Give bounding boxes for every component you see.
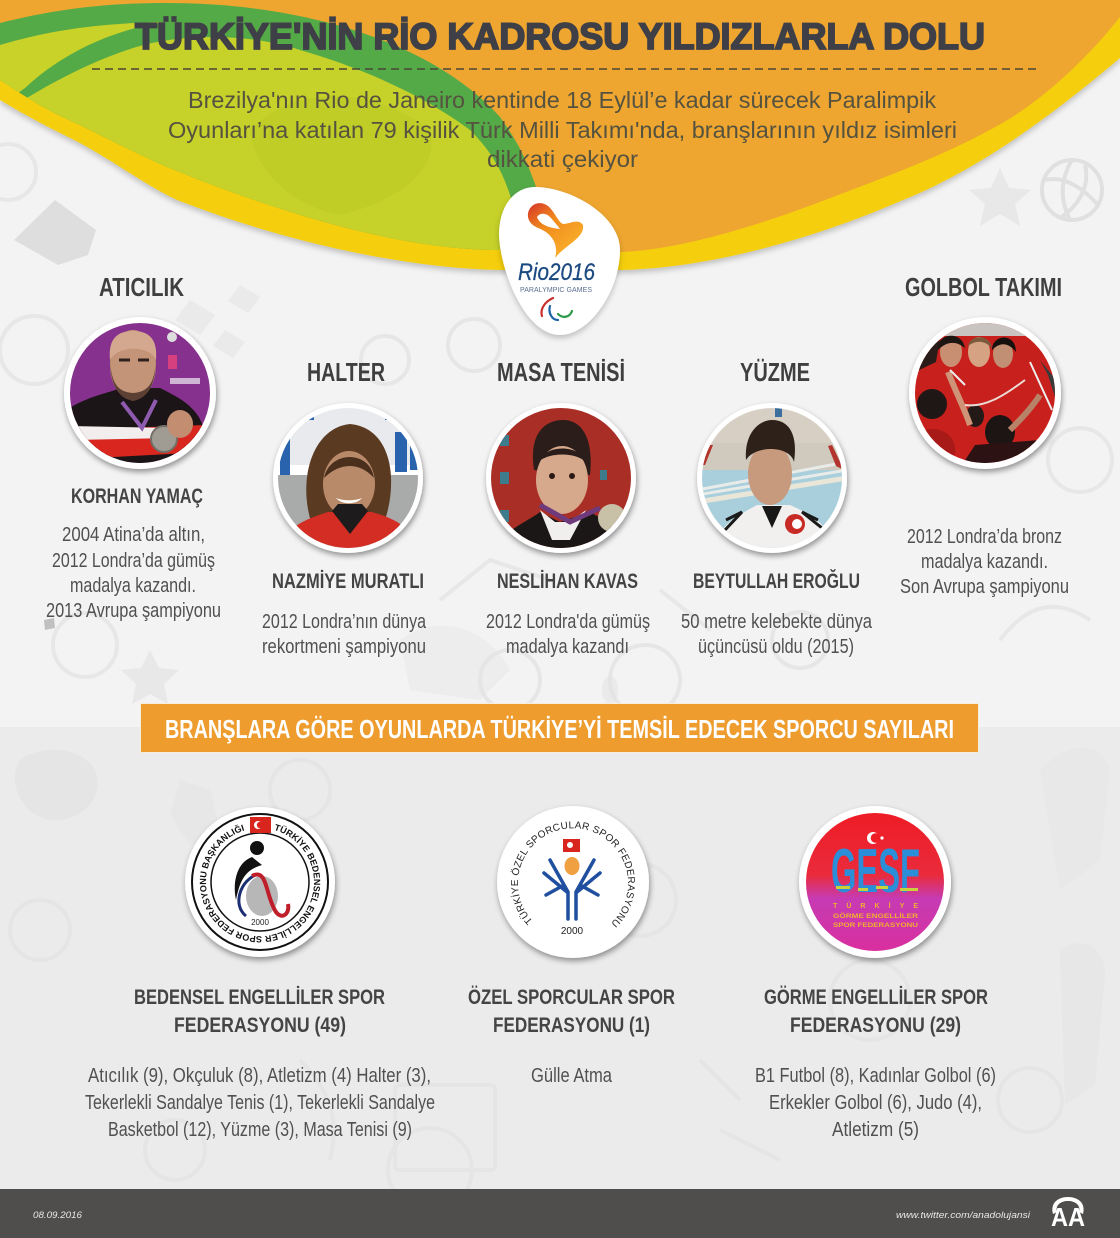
description: 2012 Londra’nın dünya <box>262 611 427 633</box>
logo: Türkiye Özel Sporcular Spor Federasyonu: TÜRKİYE ÖZEL SPORCULAR SPOR FEDERASYONU <box>510 822 635 928</box>
branch list: Atletizm (5) <box>832 1119 919 1141</box>
icon: Anadolu Agency logo: AA <box>1051 1202 1085 1232</box>
heading: swimming: YÜZME <box>740 357 810 387</box>
federation name: BEDENSEL ENGELLİLER SPOR <box>134 986 385 1009</box>
description: 2012 Londra'da gümüş <box>486 611 650 633</box>
background: upper light section <box>0 0 1120 727</box>
name: NAZMİYE MURATLI <box>272 570 424 593</box>
subtitle: Oyunları’na katılan 79 kişilik Türk Milli Takımı'nda, branşlarının yıldız isimleri <box>168 117 957 143</box>
federation name: FEDERASYONU (29) <box>790 1014 961 1037</box>
top ribbon: yellow band <box>0 0 1120 270</box>
federation: Görme Engelliler <box>755 806 996 1141</box>
footer bar <box>0 1189 1120 1238</box>
description: madalya kazandı <box>506 636 629 658</box>
federation name <box>134 986 385 1037</box>
federation: Özel Sporcular <box>468 806 675 1087</box>
logo: GESF: SPOR FEDERASYONU <box>833 923 918 929</box>
title: TÜRKİYE'NİN RİO KADROSU YILDIZLARLA DOLU <box>135 16 985 57</box>
branch list: Basketbol (12), Yüzme (3), Masa Tenisi (9) <box>108 1119 412 1141</box>
description: rekortmeni şampiyonu <box>262 636 426 658</box>
background silhouettes and stars <box>14 168 1110 1105</box>
federation name <box>764 986 988 1037</box>
icon: agitos <box>541 298 572 320</box>
heading: goalball team: GOLBOL TAKIMI <box>905 272 1062 302</box>
description: Son Avrupa şampiyonu <box>900 576 1069 598</box>
logo: Türkiye Bedensel Engelliler Spor Federasyonu <box>182 806 340 964</box>
photo: Neslihan Kavas <box>486 403 636 560</box>
name: KORHAN YAMAÇ <box>71 485 203 508</box>
logo: GESF <box>799 806 951 958</box>
heading: table tennis: MASA TENİSİ <box>497 357 625 387</box>
description: 50 metre kelebekte dünya <box>681 611 873 633</box>
branch list <box>755 1065 996 1141</box>
branch list <box>85 1065 435 1141</box>
description: üçüncüsü oldu (2015) <box>698 636 854 658</box>
athlete: Nazmiye Muratlı <box>262 357 427 658</box>
top ribbon: orange, green and lime waves <box>0 0 1120 270</box>
logo: Türkiye Özel Sporcular Spor Federasyonu: 2000 <box>561 926 584 937</box>
photo: Golbol team <box>909 317 1061 469</box>
description: 2012 Londra’da gümüş <box>52 550 215 572</box>
description: madalya kazandı. <box>70 575 196 597</box>
logo: Türkiye Bedensel Engelliler Spor Federasyonu: TÜRKİYE BEDENSEL ENGELLİLER SPOR FEDERASYONU BAŞKANLIĞI <box>200 824 320 942</box>
branch list: B1 Futbol (8), Kadınlar Golbol (6) <box>755 1065 996 1087</box>
section banner <box>140 703 979 753</box>
branch list: Atıcılık (9), Okçuluk (8), Atletizm (4) Halter (3), <box>88 1065 431 1087</box>
federation name: GÖRME ENGELLİLER SPOR <box>764 986 988 1009</box>
description <box>900 526 1069 598</box>
subtitle: Brezilya'nın Rio de Janeiro kentinde 18 Eylül’e kadar sürecek Paralimpik <box>188 87 937 113</box>
branch list: Erkekler Golbol (6), Judo (4), <box>769 1092 982 1114</box>
logo: Türkiye Bedensel Engelliler Spor Federasyonu: 2000 <box>251 918 269 927</box>
dashed divider <box>92 68 1040 70</box>
branch list: Tekerlekli Sandalye Tenis (1), Tekerlekli Sandalye <box>85 1092 435 1114</box>
description <box>262 611 427 658</box>
description: 2013 Avrupa şampiyonu <box>46 600 221 622</box>
federation name: ÖZEL SPORCULAR SPOR <box>468 986 675 1009</box>
federation name <box>468 986 675 1037</box>
name: BEYTULLAH EROĞLU <box>693 569 860 593</box>
description: madalya kazandı. <box>921 551 1048 573</box>
federation: Bedensel Engelliler <box>85 806 435 1141</box>
subtitle <box>168 87 957 172</box>
team: Golbol Takımı <box>900 272 1069 598</box>
branch list: Gülle Atma <box>531 1065 613 1087</box>
athlete: Beytullah Eroğlu <box>681 357 873 658</box>
description: 2012 Londra’da bronz <box>907 526 1062 548</box>
date: 08.09.2016 <box>33 1210 82 1220</box>
description <box>681 611 873 658</box>
athlete: Korhan Yamaç <box>46 272 221 622</box>
federation name: FEDERASYONU (49) <box>174 1014 346 1037</box>
name: NESLİHAN KAVAS <box>497 570 638 593</box>
federation name: FEDERASYONU (1) <box>493 1014 650 1037</box>
background: lower grey section <box>0 727 1120 1190</box>
Rio 2016 Paralympic logo <box>499 187 620 335</box>
photo: Korhan Yamaç <box>64 317 216 470</box>
logo: GESF: TÜRKİYE <box>833 901 918 910</box>
logo: GESF: GESF <box>831 837 920 906</box>
logo: Türkiye Özel Sporcular Spor Federasyonu <box>494 806 654 964</box>
subtitle: dikkati çekiyor <box>487 146 638 172</box>
heading: shooting: ATICILIK <box>99 272 184 302</box>
description <box>46 524 221 622</box>
photo: Nazmiye Muratlı <box>273 403 425 555</box>
description: 2004 Atina’da altın, <box>62 524 205 546</box>
twitter url: www.twitter.com/anadolujansi <box>896 1210 1031 1220</box>
icon: Rio heart emblem <box>528 203 583 258</box>
athlete: Neslihan Kavas <box>486 357 650 658</box>
logo: GESF: GÖRME ENGELLİLER <box>833 913 919 920</box>
games label: PARALYMPIC GAMES <box>520 287 592 294</box>
heading: weightlifting: HALTER <box>307 357 385 387</box>
description <box>486 611 650 658</box>
wordmark: Rio2016 <box>518 259 596 286</box>
photo: Beytullah Eroğlu <box>697 403 847 560</box>
